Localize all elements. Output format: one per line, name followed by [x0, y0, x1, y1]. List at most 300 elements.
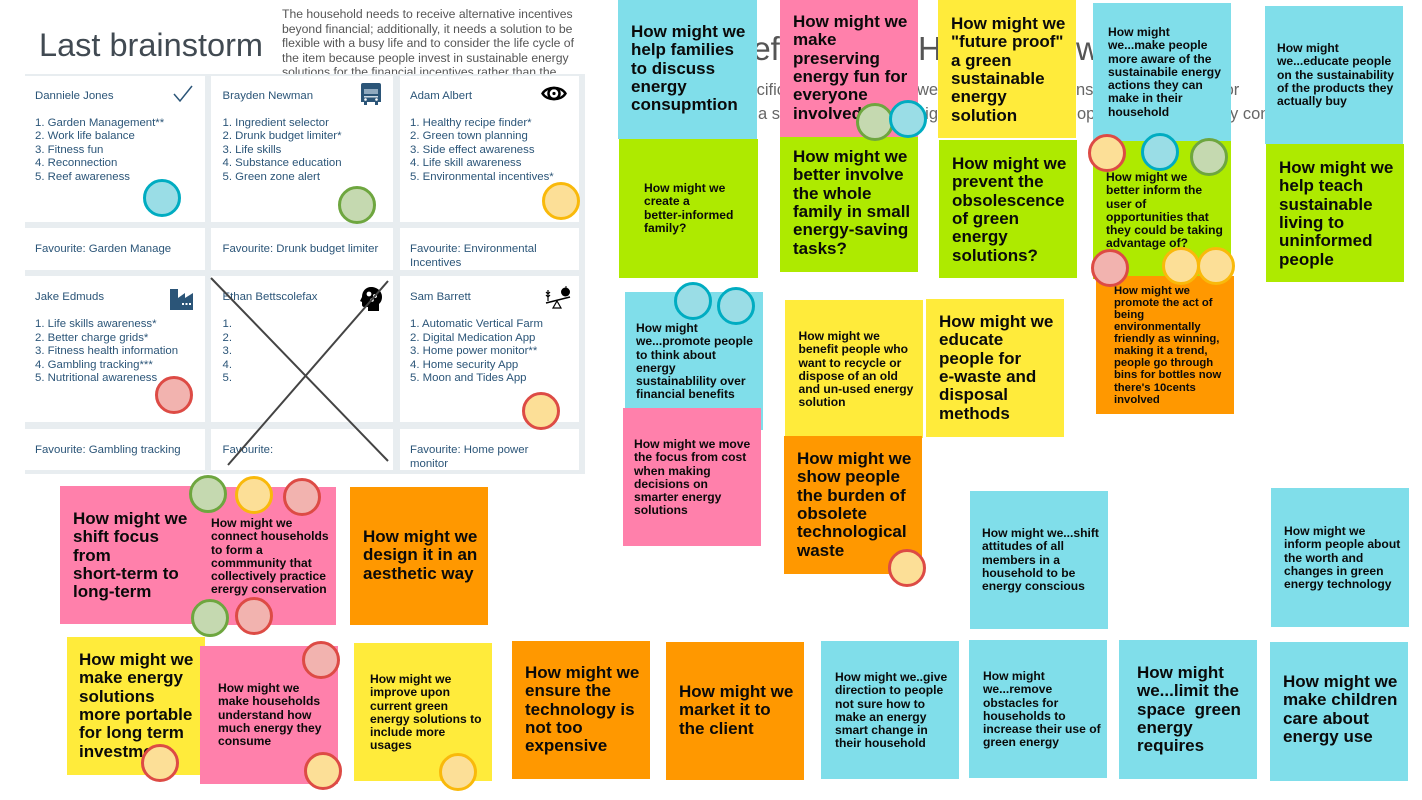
note: not too expensive: ensure the: [525, 681, 611, 700]
background subtext fragments: y con: [1230, 104, 1269, 122]
note: sustainable actions: household: [1108, 105, 1169, 119]
icon: eye: [541, 86, 567, 100]
note: worth of green tech: energy technology: [1284, 577, 1392, 591]
note: sustainable actions: make in their: [1108, 91, 1183, 105]
background subtext fragments: for: [1220, 80, 1239, 98]
note: remove obstacles: obstacles for: [983, 696, 1058, 710]
note: prevent obsolescence: obsolescence: [952, 191, 1064, 210]
note: environmentally friendly as winning: people go through: [1114, 357, 1213, 369]
note: environmentally friendly as winning: involved: [1114, 394, 1160, 406]
note: prevent obsolescence: solutions?: [952, 246, 1038, 265]
card: Sam Barrett: 3. Home power monitor**: [410, 345, 537, 357]
note: give direction: not sure how to: [835, 697, 925, 711]
note: remove obstacles: green energy: [983, 735, 1059, 749]
vote dot: blue, promote: [674, 282, 712, 320]
vote dot: red, Jake: [155, 376, 193, 414]
note: shift attitudes: members in a: [982, 553, 1060, 567]
note: remove obstacles: How might: [983, 669, 1045, 683]
note: teach sustainable living: help teach: [1279, 176, 1363, 195]
intro paragraph: the item because people invest in sustainable energy: [282, 50, 569, 64]
note: recycle or dispose: and un-used energy: [798, 382, 913, 396]
note: households understand consumption: make households: [218, 694, 320, 708]
favourite: Drunk budget limiter: Favourite: Drunk budget limiter: [222, 243, 378, 255]
note: future proof: "future proof": [951, 32, 1063, 51]
note: move focus from cost: solutions: [634, 503, 688, 517]
note: community of households: connect households: [211, 529, 329, 543]
background subtext fragments: specific: [730, 80, 785, 98]
note: move focus from cost: the focus from cost: [634, 450, 746, 464]
note: prevent obsolescence: [939, 140, 1077, 278]
note: burden of obsolete waste: How might we: [797, 449, 911, 468]
card: Danniele Jones: Danniele Jones: [35, 90, 114, 102]
note: limit space: requires: [1137, 736, 1204, 755]
icon: factory: [170, 289, 193, 310]
note: worth of green tech: [1271, 488, 1409, 627]
note: environmentally friendly as winning: environmentally: [1114, 321, 1201, 333]
card: Danniele Jones: 1. Garden Management**: [35, 116, 164, 128]
note: households understand consumption: understand how: [218, 708, 311, 722]
note: prevent obsolescence: energy: [952, 227, 1008, 246]
vote dot: blue, inform user: [1141, 133, 1179, 171]
note: sustainable actions: more aware of the: [1108, 52, 1212, 66]
note: community of households: collectively practice: [211, 569, 326, 583]
note: inform the user: better inform the: [1106, 183, 1202, 197]
note: educate on sustainability: actually buy: [1277, 94, 1347, 108]
vote dot: peach, understand: [304, 752, 342, 790]
note: help families: consupmtion: [631, 95, 738, 114]
note: aesthetic design: [350, 487, 488, 625]
note: preserving energy fun: everyone: [793, 85, 868, 104]
note: educate on sustainability: [1265, 6, 1403, 144]
card: Ethan Bettscolefax: 5.: [222, 372, 232, 384]
card: Sam Barrett: 5. Moon and Tides App: [410, 372, 527, 384]
card: Brayden Newman: 1. Ingredient selector: [222, 116, 329, 128]
note: e-waste education: educate: [939, 330, 1003, 349]
note: future proof: energy: [951, 87, 1007, 106]
note: move focus from cost: [623, 408, 761, 546]
favourite: Gambling tracking: [25, 429, 205, 470]
note: promote sustainability: sustainablility over: [636, 374, 746, 388]
card: Ethan Bettscolefax: [211, 276, 393, 422]
card: Danniele Jones: 5. Reef awareness: [35, 170, 130, 182]
card: Jake Edmuds: 1. Life skills awareness*: [35, 318, 157, 330]
vote dot: yellow, community: [235, 476, 273, 514]
note: give direction: their household: [835, 736, 926, 750]
note: recycle or dispose: How might we: [798, 329, 880, 343]
note: sustainable actions: [1093, 3, 1231, 141]
note: community of households: How might we: [211, 516, 292, 530]
card: Ethan Bettscolefax: Ethan Bettscolefax: [222, 291, 317, 303]
note: inform the user: opportunities that: [1106, 210, 1209, 224]
note: children care: [1270, 642, 1408, 781]
note: limit space: [1119, 640, 1257, 779]
note: inform the user: advantage of?: [1106, 236, 1188, 250]
card: Sam Barrett: [400, 276, 579, 422]
note: recycle or dispose: benefit people who: [798, 342, 908, 356]
note: better-informed family: How might we: [644, 181, 725, 195]
vote dot: yellow, winning second: [1197, 247, 1235, 285]
card: Danniele Jones: 4. Reconnection: [35, 157, 117, 169]
intro paragraph: beyond financial; additionally, it needs a solution to be: [282, 22, 572, 36]
note: involve whole family: [780, 137, 918, 272]
note: e-waste education: [926, 299, 1064, 437]
card: Adam Albert: Adam Albert: [410, 90, 472, 102]
note: sustainable actions: sustainabile energy: [1108, 65, 1221, 79]
note: portable solutions: make energy: [79, 668, 183, 687]
note: improve current solutions: How might we: [370, 672, 451, 686]
card: Jake Edmuds: 2. Better charge grids*: [35, 332, 148, 344]
vote dot: blue, Danniele: [143, 179, 181, 217]
vote dot: blue, promote second: [717, 287, 755, 325]
note: worth of green tech: inform people about: [1284, 537, 1400, 551]
intro paragraph: [282, 7, 574, 79]
note: limit space: space green: [1137, 700, 1241, 719]
card: Danniele Jones: 3. Fitness fun: [35, 144, 103, 156]
note: not too expensive: expensive: [525, 736, 607, 755]
vote dot: peach, inform user: [1088, 134, 1126, 172]
note: preserving energy fun: How might we: [793, 12, 907, 31]
note: promote sustainability: to think about: [636, 348, 716, 362]
note: limit space: How might: [1137, 663, 1224, 682]
note: portable solutions: [67, 637, 205, 775]
favourite: Environmental Incentives: Incentives: [410, 256, 461, 268]
note: environmentally friendly as winning: bins for bottles now: [1114, 369, 1221, 381]
note: better-informed family: better-informed: [644, 208, 733, 222]
note: e-waste education: methods: [939, 404, 1010, 423]
card: Danniele Jones: [25, 76, 205, 222]
note: teach sustainable living: sustainable: [1279, 195, 1373, 214]
note: households understand consumption: [200, 646, 338, 784]
vote dot: peach, Sam: [522, 392, 560, 430]
card: Jake Edmuds: 5. Nutritional awareness: [35, 372, 157, 384]
background heading fragment: Brief: [712, 30, 780, 67]
note: teach sustainable living: uninformed: [1279, 231, 1372, 250]
note: portable solutions: for long term: [79, 723, 184, 742]
favourite: empty: Favourite:: [222, 444, 273, 456]
note: children care: care about: [1283, 709, 1369, 728]
note: involve whole family: energy-saving: [793, 220, 908, 239]
intro paragraph: solutions for the financial incentives rather than the: [282, 65, 556, 79]
vote dot: yellow, improve: [439, 753, 477, 791]
note: shift attitudes: attitudes of all: [982, 539, 1064, 553]
favourite: Gambling tracking: Favourite: Gambling tracking: [35, 444, 181, 456]
note: remove obstacles: households to: [983, 709, 1066, 723]
note: environmentally friendly as winning: friendly as winning,: [1114, 333, 1219, 345]
note: children care: How might we: [1283, 672, 1397, 691]
note: children care: energy use: [1283, 727, 1373, 746]
vote dot: peach, portable: [141, 744, 179, 782]
note: educate on sustainability: we...educate people: [1277, 54, 1391, 68]
note: limit space: energy: [1137, 718, 1193, 737]
background subtext fragments: [730, 80, 1269, 122]
note: move focus from cost: when making: [634, 464, 711, 478]
note: aesthetic design: How might we: [363, 527, 477, 546]
note: portable solutions: more portable: [79, 705, 192, 724]
background heading fragment: we: [1076, 30, 1118, 67]
card: Adam Albert: 2. Green town planning: [410, 130, 528, 142]
note: market to client: the client: [679, 719, 754, 738]
note: e-waste education: people for: [939, 349, 1021, 368]
note: improve current solutions: current green: [370, 699, 448, 713]
vote dot: red, community lower: [235, 597, 273, 635]
note: involve whole family: family in small: [793, 202, 910, 221]
vote dot: yellow, winning: [1162, 247, 1200, 285]
note: e-waste education: e-waste and: [939, 367, 1036, 386]
note: market to client: How might we: [679, 682, 793, 701]
note: promote sustainability: energy: [636, 361, 676, 375]
vote dot: green, shift focus: [189, 475, 227, 513]
icon: head with gears: [360, 287, 382, 311]
intro paragraph: flexible with a busy life and to consider the life cycle of: [282, 36, 574, 50]
note: recycle or dispose: want to recycle or: [798, 356, 901, 370]
note: involve whole family: tasks?: [793, 239, 847, 258]
vote dot: red, understand: [302, 641, 340, 679]
note: improve current solutions: include more: [370, 725, 445, 739]
icon: check mark: [174, 86, 192, 102]
note: preserving energy fun: make: [793, 30, 836, 49]
vote dot: green, community lower: [191, 599, 229, 637]
panel: crazy eights table: [25, 74, 585, 474]
note: future proof: [938, 0, 1076, 138]
card: Ethan Bettscolefax: 1.: [222, 318, 232, 330]
card: Sam Barrett: 1. Automatic Vertical Farm: [410, 318, 543, 330]
card: Brayden Newman: 5. Green zone alert: [222, 170, 320, 182]
background subtext fragments: op: [1077, 104, 1095, 122]
note: environmentally friendly as winning: making it a trend,: [1114, 345, 1208, 357]
note: community of households: erergy conservation: [211, 582, 327, 596]
favourite: Home power monitor: Favourite: Home power: [410, 444, 528, 456]
card: Jake Edmuds: 3. Fitness health information: [35, 345, 178, 357]
vote dot: green, energy fun: [856, 103, 894, 141]
note: help families: energy: [631, 77, 687, 96]
note: promote sustainability: How might: [636, 321, 698, 335]
vote dot: red, winning: [1091, 249, 1129, 287]
card: Sam Barrett: 4. Home security App: [410, 358, 518, 370]
note: move focus from cost: smarter energy: [634, 490, 721, 504]
note: environmentally friendly as winning: [1096, 276, 1234, 414]
note: not too expensive: not too: [525, 718, 583, 737]
note: short-term to long-term: [60, 486, 198, 624]
favourite: Environmental Incentives: Favourite: Environmental: [410, 243, 537, 255]
note: improve current solutions: improve upon: [370, 685, 450, 699]
note: help families: [618, 0, 757, 139]
note: help families: How might we: [631, 22, 745, 41]
note: remove obstacles: [969, 640, 1107, 778]
note: community of households: commmunity that: [211, 556, 312, 570]
note: e-waste education: disposal: [939, 385, 1008, 404]
note: burden of obsolete waste: the burden of: [797, 486, 906, 505]
note: help families: to discuss: [631, 59, 715, 78]
background subtext fragments: ns: [1076, 80, 1093, 98]
note: shift attitudes: household to be: [982, 566, 1075, 580]
crossed-out lines over Ethan card: [210, 277, 389, 466]
note: burden of obsolete waste: [784, 436, 922, 574]
note: aesthetic design: design it in an: [363, 545, 477, 564]
card: Adam Albert: [400, 76, 579, 222]
card: Jake Edmuds: 4. Gambling tracking***: [35, 358, 153, 370]
note: improve current solutions: usages: [370, 738, 412, 752]
note: give direction: How might we..give: [835, 670, 947, 684]
vote dot: blue, energy fun: [889, 100, 927, 138]
note: give direction: make an energy: [835, 710, 926, 724]
card: Sam Barrett: 2. Digital Medication App: [410, 332, 535, 344]
note: shift attitudes: How might we...shift: [982, 526, 1099, 540]
note: shift attitudes: [970, 491, 1108, 629]
favourite: Garden Manage: Favourite: Garden Manage: [35, 243, 171, 255]
favourite: Garden Manage: [25, 228, 205, 270]
note: inform the user: [1093, 141, 1231, 279]
card: Sam Barrett: Sam Barrett: [410, 291, 471, 303]
favourite: Environmental Incentives: [400, 228, 579, 270]
note: community of households: [198, 487, 336, 625]
note: sustainable actions: How might: [1108, 25, 1170, 39]
note: educate on sustainability: How might: [1277, 41, 1339, 55]
favourite: Home power monitor: monitor: [410, 458, 448, 470]
card: Ethan Bettscolefax: 4.: [222, 358, 232, 370]
note: teach sustainable living: living to: [1279, 213, 1344, 232]
note: prevent obsolescence: prevent the: [952, 172, 1044, 191]
note: e-waste education: How might we: [939, 312, 1053, 331]
note: inform the user: How might we: [1106, 170, 1187, 184]
note: teach sustainable living: people: [1279, 250, 1334, 269]
card: Ethan Bettscolefax: 2.: [222, 332, 232, 344]
note: give direction: direction to people: [835, 683, 943, 697]
note: portable solutions: How might we: [79, 650, 193, 669]
note: teach sustainable living: [1266, 144, 1404, 282]
note: future proof: solution: [951, 106, 1017, 125]
note: inform the user: they could be taking: [1106, 223, 1223, 237]
note: move focus from cost: decisions on: [634, 477, 708, 491]
note: community of households: to form a: [211, 543, 263, 557]
note: not too expensive: How might we: [525, 663, 639, 682]
note: promote sustainability: financial benefits: [636, 387, 735, 401]
note: move focus from cost: How might we move: [634, 437, 750, 451]
favourite: Home power monitor: [400, 429, 579, 470]
card: Jake Edmuds: Jake Edmuds: [35, 291, 104, 303]
note: recycle or dispose: dispose of an old: [798, 369, 898, 383]
title: Last brainstorm: [39, 27, 263, 63]
note: aesthetic design: aesthetic way: [363, 564, 474, 583]
note: teach sustainable living: How might we: [1279, 158, 1393, 177]
note: educate on sustainability: of the products they: [1277, 81, 1393, 95]
note: burden of obsolete waste: show people: [797, 467, 900, 486]
vote dot: peach, burden: [888, 549, 926, 587]
card: Adam Albert: 4. Life skill awareness: [410, 157, 521, 169]
note: preserving energy fun: [780, 0, 918, 137]
note: inform the user: user of: [1106, 197, 1146, 211]
note: burden of obsolete waste: obsolete: [797, 504, 867, 523]
note: remove obstacles: increase their use of: [983, 722, 1101, 736]
vote dot: green, Brayden: [338, 186, 376, 224]
note: short-term to long-term: shift focus: [73, 527, 159, 546]
card: Brayden Newman: [211, 76, 393, 222]
note: not too expensive: technology is: [525, 700, 635, 719]
note: households understand consumption: How might we: [218, 681, 299, 695]
note: environmentally friendly as winning: being: [1114, 309, 1144, 321]
card: Danniele Jones: 2. Work life balance: [35, 130, 135, 142]
note: short-term to long-term: How might we: [73, 509, 187, 528]
note: households understand consumption: much energy they: [218, 721, 322, 735]
note: environmentally friendly as winning: there's 10cents: [1114, 382, 1196, 394]
note: environmentally friendly as winning: promote the act of: [1114, 297, 1213, 309]
background heading fragment: How: [918, 30, 984, 67]
note: environmentally friendly as winning: How might we: [1114, 285, 1190, 297]
note: improve current solutions: energy solutions to: [370, 712, 482, 726]
note: better-informed family: [619, 139, 758, 278]
note: preserving energy fun: involved: [793, 104, 862, 123]
note: short-term to long-term: from: [73, 546, 111, 565]
favourite: empty: [211, 429, 393, 470]
card: Ethan Bettscolefax: 3.: [222, 345, 232, 357]
icon: truck: [361, 83, 381, 105]
intro paragraph: The household needs to receive alternative incentives: [282, 7, 573, 21]
note: involve whole family: the whole: [793, 184, 871, 203]
note: sustainable actions: we...make people: [1108, 38, 1207, 52]
note: burden of obsolete waste: waste: [797, 541, 844, 560]
note: better-informed family: family?: [644, 221, 686, 235]
note: short-term to long-term: short-term to: [73, 564, 179, 583]
icon: balance scale: [546, 286, 570, 309]
vote dot: red, community: [283, 478, 321, 516]
note: future proof: a green: [951, 51, 1011, 70]
note: help families: help families: [631, 40, 734, 59]
note: give direction: smart change in: [835, 723, 928, 737]
note: promote sustainability: we...promote people: [636, 334, 753, 348]
note: promote sustainability: [625, 292, 763, 430]
note: children care: make children: [1283, 690, 1397, 709]
note: improve current solutions: [354, 643, 492, 781]
favourite: Drunk budget limiter: [211, 228, 393, 270]
note: future proof: How might we: [951, 14, 1065, 33]
card: Adam Albert: 5. Environmental incentives*: [410, 170, 554, 182]
card: Brayden Newman: Brayden Newman: [222, 90, 313, 102]
note: households understand consumption: consume: [218, 734, 271, 748]
note: prevent obsolescence: of green: [952, 209, 1019, 228]
card: Adam Albert: 1. Healthy recipe finder*: [410, 116, 532, 128]
note: limit space: we...limit the: [1137, 681, 1239, 700]
note: market to client: market it to: [679, 700, 771, 719]
note: better-informed family: create a: [644, 194, 690, 208]
note: recycle or dispose: [785, 300, 923, 438]
background heading fragment: [712, 30, 1118, 67]
note: not too expensive: [512, 641, 650, 779]
note: worth of green tech: the worth and: [1284, 551, 1363, 565]
note: give direction: [821, 641, 959, 779]
card: Brayden Newman: 4. Substance education: [222, 157, 342, 169]
note: portable solutions: solutions: [79, 687, 155, 706]
note: educate on sustainability: on the sustainability: [1277, 68, 1394, 82]
note: portable solutions: investment: [79, 742, 169, 761]
vote dot: green, inform user: [1190, 138, 1228, 176]
note: preserving energy fun: preserving: [793, 49, 880, 68]
note: recycle or dispose: solution: [798, 395, 846, 409]
background subtext fragments: we: [917, 80, 938, 98]
card: Jake Edmuds: [25, 276, 205, 422]
background subtext fragments: high: [916, 104, 947, 122]
note: future proof: sustainable: [951, 69, 1045, 88]
card: Brayden Newman: 3. Life skills: [222, 144, 281, 156]
vote dot: yellow, Adam: [542, 182, 580, 220]
note: sustainable actions: actions they can: [1108, 78, 1203, 92]
note: worth of green tech: changes in green: [1284, 564, 1383, 578]
card: Adam Albert: 3. Side effect awareness: [410, 144, 535, 156]
note: remove obstacles: we...remove: [983, 682, 1052, 696]
note: involve whole family: better involve: [793, 165, 904, 184]
note: burden of obsolete waste: technological: [797, 522, 907, 541]
note: involve whole family: How might we: [793, 147, 907, 166]
card: Brayden Newman: 2. Drunk budget limiter*: [222, 130, 342, 142]
note: prevent obsolescence: How might we: [952, 154, 1066, 173]
